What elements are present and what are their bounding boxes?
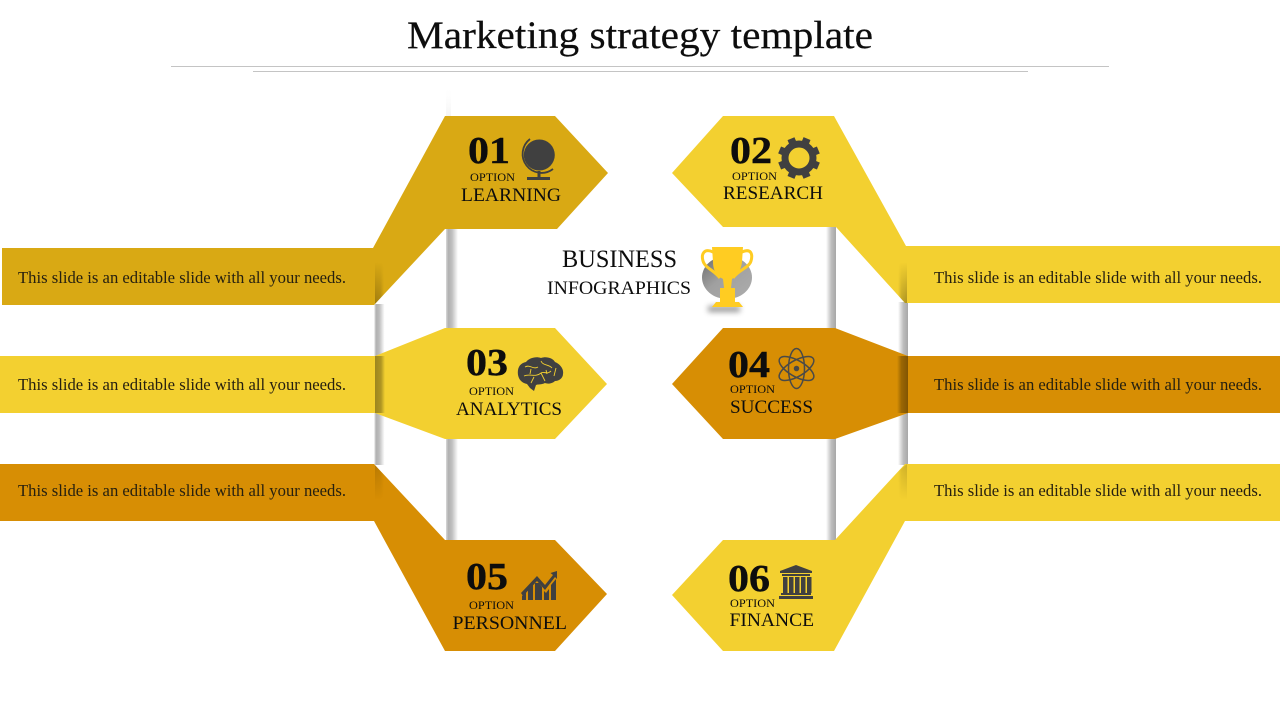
number 04: 04 xyxy=(728,344,770,386)
shading 06 xyxy=(900,464,907,492)
icon: globe xyxy=(523,139,555,180)
option 03: OPTION xyxy=(469,384,514,398)
number 01: 01 xyxy=(468,130,510,172)
option 01: OPTION xyxy=(470,170,515,184)
shading 03 xyxy=(375,356,385,413)
text 03: This slide is an editable slide with all your needs. xyxy=(18,375,346,394)
panel: 06 finance xyxy=(672,464,1280,651)
number 05: 05 xyxy=(466,556,508,598)
icon: gear xyxy=(772,131,826,185)
number 02: 02 xyxy=(730,130,772,172)
icon: trophy xyxy=(702,247,752,312)
shading 01 xyxy=(375,268,383,304)
icon: atom xyxy=(776,348,817,388)
text 04: This slide is an editable slide with all your needs. xyxy=(934,375,1262,394)
icon: brain xyxy=(518,357,563,391)
panel: 01 learning xyxy=(2,116,608,305)
panel: 05 personnel xyxy=(0,464,607,651)
vertical shadow strips xyxy=(374,85,908,541)
option 06: OPTION xyxy=(730,596,775,610)
arrow shape 01 xyxy=(2,116,608,305)
center heading xyxy=(547,246,691,299)
label 05: PERSONNEL xyxy=(452,613,567,634)
heading: infographics: INFOGRAPHICS xyxy=(547,278,691,299)
label 02: RESEARCH xyxy=(723,183,823,204)
label 06: FINANCE xyxy=(730,610,814,631)
title underlines xyxy=(171,66,1109,72)
icon: growth chart xyxy=(521,571,557,600)
option 02: OPTION xyxy=(732,169,777,183)
option 05: OPTION xyxy=(469,598,514,612)
icon: bank xyxy=(779,565,813,599)
title: Marketing strategy template xyxy=(407,13,873,57)
arrow shape 05 xyxy=(0,464,607,651)
text 05: This slide is an editable slide with all your needs. xyxy=(18,481,346,500)
label 04: SUCCESS xyxy=(730,397,813,418)
arrow shape 04 xyxy=(672,328,1280,439)
text 06: This slide is an editable slide with all your needs. xyxy=(934,481,1262,500)
text 02: This slide is an editable slide with all your needs. xyxy=(934,268,1262,287)
shading 05 xyxy=(375,465,382,490)
label 01: LEARNING xyxy=(461,185,561,206)
arrow shape 06 xyxy=(672,464,1280,651)
option 04: OPTION xyxy=(730,382,775,396)
shading 02 xyxy=(898,266,907,303)
number 03: 03 xyxy=(466,342,508,384)
arrow shape 02 xyxy=(672,116,1280,303)
text 01: This slide is an editable slide with all your needs. xyxy=(18,268,346,287)
label 03: ANALYTICS xyxy=(456,399,562,420)
number 06: 06 xyxy=(728,558,770,600)
panel: 04 success xyxy=(672,328,1280,439)
panel: 02 research xyxy=(672,116,1280,303)
heading: business: BUSINESS xyxy=(562,246,677,273)
shading 04 xyxy=(897,356,908,413)
panel: 03 analytics xyxy=(0,328,607,439)
arrow shape 03 xyxy=(0,328,607,439)
